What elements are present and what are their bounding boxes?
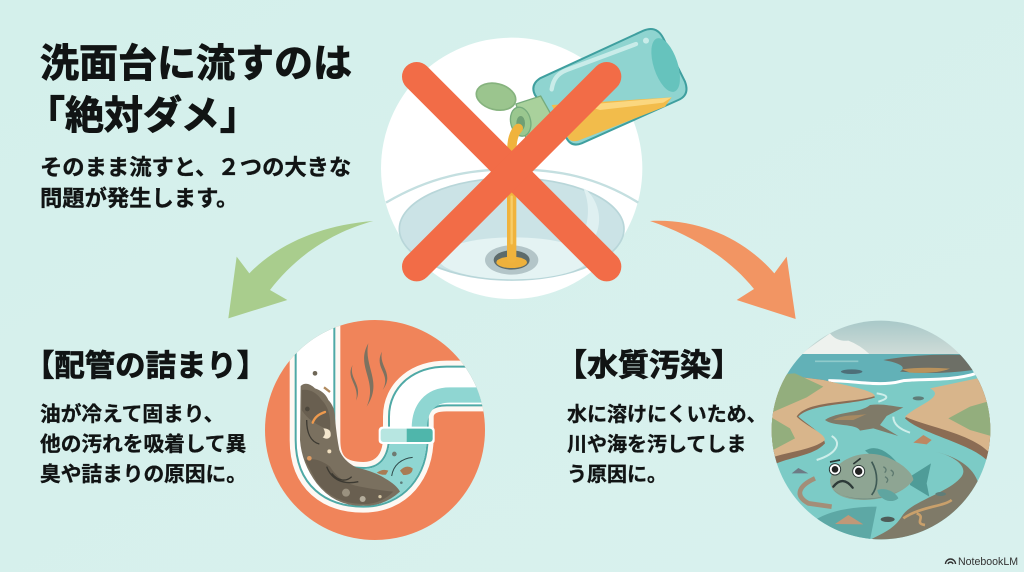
foam line xyxy=(828,373,977,384)
orange circle xyxy=(265,320,485,540)
text: water pollution: 川や海を汚してしま xyxy=(567,433,746,456)
icon: NotebookLM mark xyxy=(946,559,956,564)
debris in water xyxy=(313,371,413,484)
title: 洗面台に流すのは xyxy=(40,43,352,86)
text: water pollution: 水に溶けにくいため、 xyxy=(567,403,767,426)
intro text: 問題が発生します。 xyxy=(40,185,238,211)
illustration: clogged pipe xyxy=(265,320,485,540)
right bank xyxy=(905,375,993,460)
text: pipe clog: 臭や詰まりの原因に。 xyxy=(40,463,247,486)
arrow: green left xyxy=(228,221,373,318)
sink basin xyxy=(386,169,638,280)
sad fish xyxy=(829,448,931,501)
text: pipe clog: 油が冷えて固まり、 xyxy=(40,402,224,426)
text: pipe clog: 他の汚れを吸着して異 xyxy=(40,433,246,456)
river water xyxy=(770,373,993,543)
text: pipe clog xyxy=(40,402,247,486)
arrow: orange right xyxy=(650,221,796,319)
intro text: そのまま流すと、２つの大きな xyxy=(40,155,351,180)
text: water pollution xyxy=(567,403,767,486)
trap pipe xyxy=(315,303,493,487)
sky xyxy=(802,320,960,354)
white circle backdrop xyxy=(381,38,642,299)
oil stream xyxy=(512,128,518,258)
NotebookLM logo: NotebookLM xyxy=(958,556,1018,568)
oil slick in river xyxy=(800,405,978,540)
left bank xyxy=(770,373,875,467)
title xyxy=(26,43,352,138)
title: 「絶対ダメ」 xyxy=(26,95,259,138)
oil bottle xyxy=(533,29,686,145)
bottle cap xyxy=(473,79,553,141)
illustration: oil poured into sink, crossed out xyxy=(381,29,686,299)
rocks and ripples xyxy=(792,393,946,540)
sludge xyxy=(300,384,400,506)
pipe clamp xyxy=(379,427,435,444)
sea xyxy=(782,354,980,384)
text: water pollution: う原因に。 xyxy=(567,464,667,486)
illustration: polluted river xyxy=(770,320,993,543)
odor waves xyxy=(350,343,387,407)
red cross xyxy=(417,77,607,267)
heading: pipe clog: 【配管の詰まり】 xyxy=(24,349,267,383)
intro text xyxy=(40,155,351,211)
heading: water pollution: 【水質汚染】 xyxy=(556,348,742,383)
